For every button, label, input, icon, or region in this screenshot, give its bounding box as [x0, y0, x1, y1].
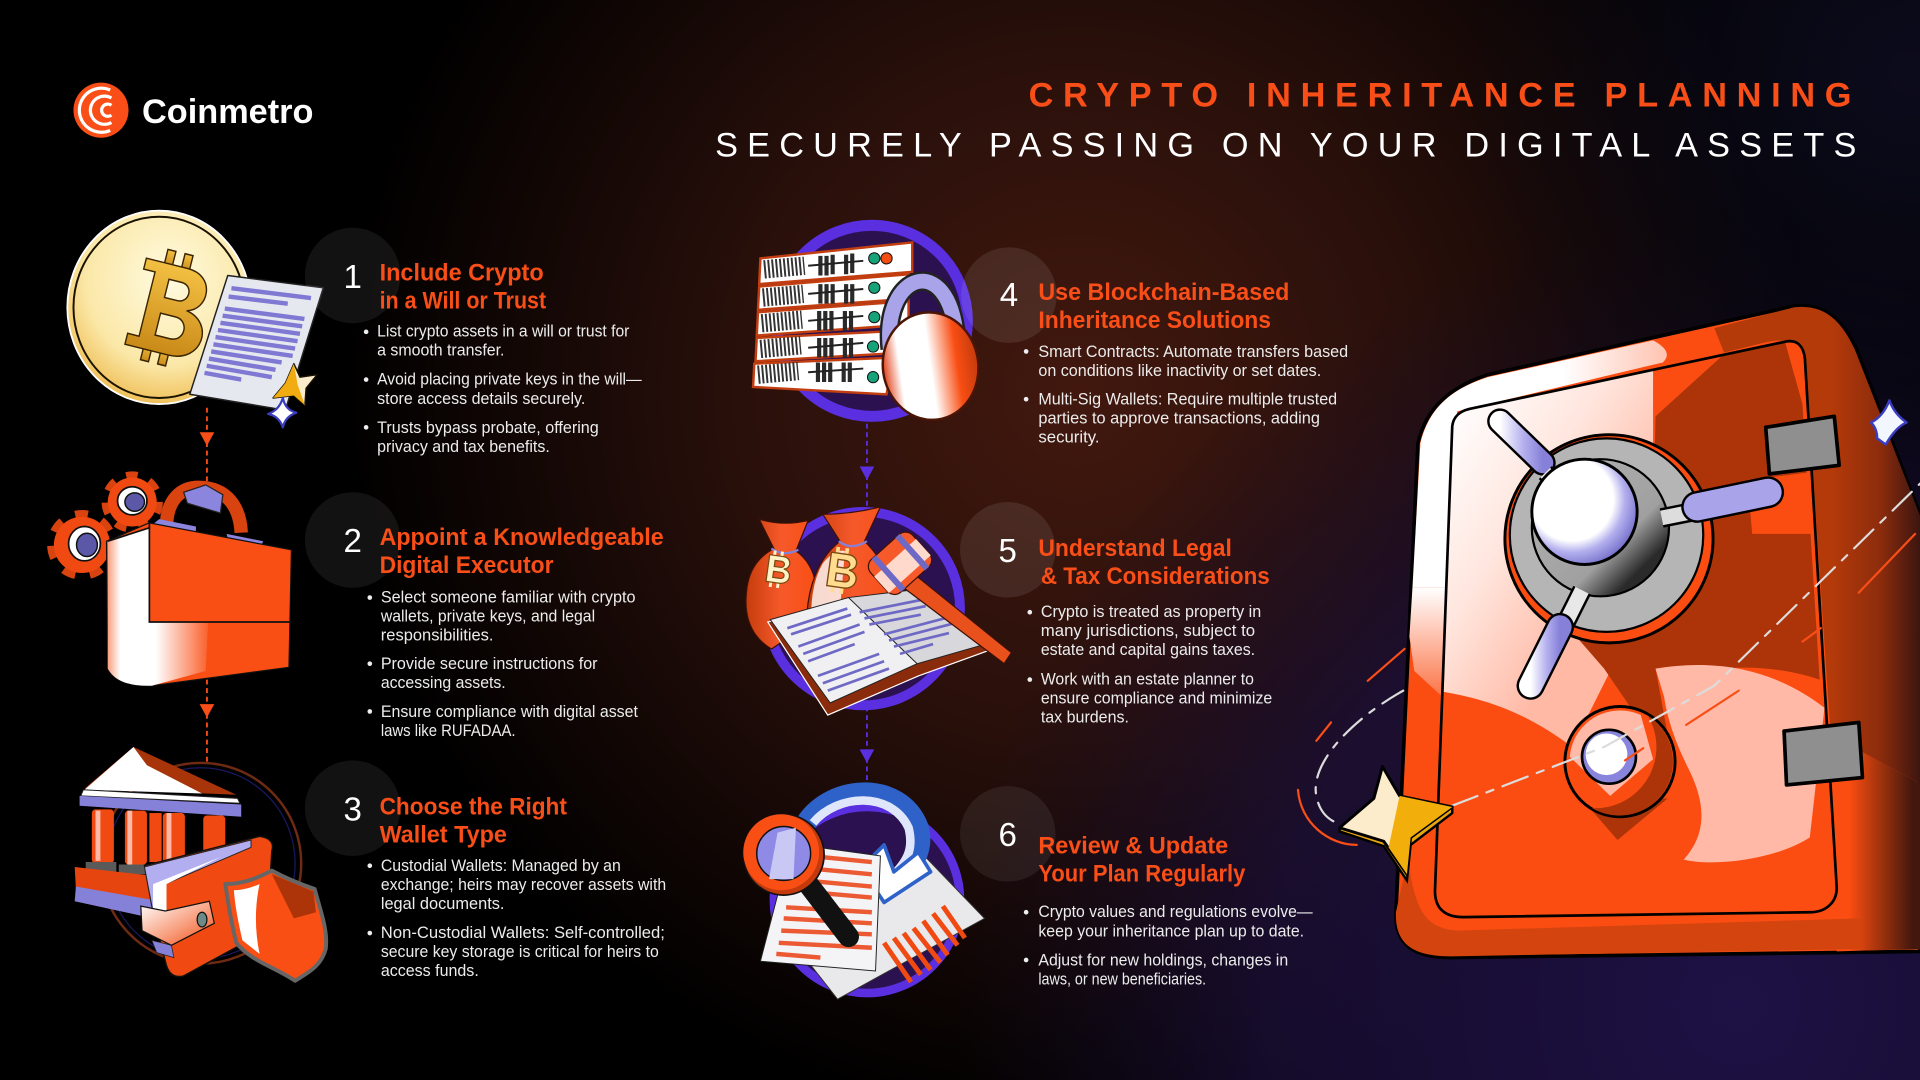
step 3 bullets: Non-Custodial Wallets: Self-controlled;	[381, 924, 665, 942]
step 6 number badge	[960, 786, 1056, 882]
panel: step 1	[305, 228, 642, 456]
step 4 bullets: Multi-Sig Wallets: Require multiple trusted	[1038, 391, 1337, 409]
dial spoke: right	[1662, 492, 1768, 518]
step 1 bullets: Trusts bypass probate, offering	[377, 419, 599, 437]
step 6 bullets	[1024, 903, 1313, 988]
step 5 bullets: ensure compliance and minimize	[1041, 689, 1272, 707]
sparkle	[1871, 400, 1907, 444]
step 3 heading	[380, 793, 567, 848]
step 5 heading	[1038, 535, 1270, 590]
step 1 bullets: List crypto assets in a will or trust for	[377, 323, 630, 341]
step 5 bullets: many jurisdictions, subject to	[1041, 622, 1255, 640]
orbit dashes	[1298, 484, 1920, 845]
panel: step 5	[960, 502, 1272, 726]
step 6 heading: Review & Update	[1038, 832, 1228, 859]
step 4 bullets: security.	[1038, 429, 1100, 447]
step 2 number badge	[305, 492, 400, 588]
step 4 heading: Inheritance Solutions	[1038, 307, 1271, 334]
step 4 heading: Use Blockchain-Based	[1038, 279, 1289, 306]
step 6 bullets: laws, or new beneficiaries.	[1038, 970, 1206, 988]
step 3 bullets: access funds.	[381, 962, 479, 980]
step 5 heading: Understand Legal	[1038, 535, 1232, 562]
step 2 bullets: laws like RUFADAA.	[381, 722, 516, 740]
step 5 heading: & Tax Considerations	[1041, 563, 1270, 590]
logo: Coinmetro	[73, 83, 313, 138]
step 1 bullets: privacy and tax benefits.	[377, 438, 550, 456]
step 4 heading	[1038, 279, 1289, 334]
step 2 heading: Appoint a Knowledgeable	[380, 524, 664, 551]
arrow: step 1 to 2	[200, 408, 214, 487]
step 4 number badge	[961, 247, 1057, 343]
arrow: step 2 to 3	[200, 680, 214, 764]
step 3 number badge	[305, 760, 400, 856]
step 5 bullets	[1027, 603, 1272, 726]
step 1 bullets: a smooth transfer.	[377, 342, 504, 360]
step 6 bullets: keep your inheritance plan up to date.	[1038, 923, 1304, 941]
illustration: large safe	[1298, 306, 1920, 958]
step 2 number badge: 2	[343, 523, 362, 560]
step 2 bullets: Provide secure instructions for	[381, 655, 598, 673]
step 3 heading: Choose the Right	[380, 793, 567, 820]
panel: step 2	[305, 492, 664, 740]
safe hinges	[1766, 416, 1862, 785]
step 2 heading	[380, 524, 664, 579]
step 5 number badge	[960, 502, 1056, 598]
arrow: step 4 to 5	[860, 398, 874, 509]
step 5 number badge: 5	[999, 533, 1017, 570]
step 3 bullets: legal documents.	[381, 895, 504, 913]
step 3 bullets: exchange; heirs may recover assets with	[381, 876, 666, 894]
icon: money bags, law book and gavel	[746, 507, 1011, 715]
arrow: step 5 to 6	[860, 698, 874, 784]
dial knob	[1532, 459, 1637, 564]
step 5 bullets: estate and capital gains taxes.	[1041, 641, 1255, 659]
title: CRYPTO INHERITANCE PLANNING	[1029, 77, 1851, 115]
safe body	[1396, 306, 1920, 958]
step 4 bullets: Smart Contracts: Automate transfers based	[1038, 343, 1348, 361]
step 2 bullets: Select someone familiar with crypto	[381, 588, 636, 606]
icon: bank, wallet and shield	[75, 747, 326, 981]
step 6 heading: Your Plan Regularly	[1038, 861, 1246, 888]
step 4 bullets: parties to approve transactions, adding	[1038, 410, 1320, 428]
safe dial	[1500, 421, 1768, 686]
step 2 bullets: wallets, private keys, and legal	[380, 607, 595, 625]
icon: server with padlock	[753, 225, 985, 426]
step 3 bullets: Custodial Wallets: Managed by an	[381, 857, 621, 875]
step 2 bullets: accessing assets.	[381, 674, 506, 692]
icon: magnifier, documents and refresh arrow	[743, 793, 984, 999]
icon: bitcoin coin and will document	[67, 211, 323, 427]
step 1 bullets: Avoid placing private keys in the will—	[377, 370, 642, 388]
step 1 bullets: store access details securely.	[377, 390, 585, 408]
step 6 number badge: 6	[999, 817, 1017, 854]
panel: step 4	[961, 247, 1348, 447]
step 4 number badge: 4	[1000, 277, 1018, 314]
step 2 bullets: responsibilities.	[381, 626, 493, 644]
safe door	[1435, 341, 1837, 917]
safe lower keyhole knob	[1565, 707, 1675, 840]
step 2 bullets: Ensure compliance with digital asset	[381, 703, 638, 721]
step 5 bullets: Work with an estate planner to	[1041, 670, 1254, 688]
step 1 heading: in a Will or Trust	[380, 288, 546, 315]
step 5 bullets: Crypto is treated as property in	[1041, 603, 1261, 621]
step 3 heading: Wallet Type	[380, 821, 507, 848]
step 4 bullets: on conditions like inactivity or set dates.	[1038, 362, 1321, 380]
step 6 heading	[1038, 832, 1246, 888]
step 3 bullets	[367, 857, 666, 980]
step 2 heading: Digital Executor	[380, 552, 554, 579]
step 2 bullets	[367, 588, 638, 740]
icon: briefcase and gears	[53, 476, 291, 686]
step 3 number badge: 3	[343, 791, 362, 828]
step 6 bullets: Adjust for new holdings, changes in	[1038, 952, 1288, 970]
step 1 bullets	[364, 323, 642, 456]
step 3 bullets: secure key storage is critical for heirs to	[381, 943, 659, 961]
dial spoke: upper	[1500, 421, 1562, 490]
star	[1340, 767, 1452, 880]
step 5 bullets: tax burdens.	[1041, 708, 1129, 726]
step 6 bullets: Crypto values and regulations evolve—	[1038, 903, 1313, 921]
panel: step 6	[960, 786, 1313, 988]
subtitle: SECURELY PASSING ON YOUR DIGITAL ASSETS	[715, 127, 1856, 165]
dial spoke: lower	[1531, 590, 1582, 686]
logo: Coinmetro: Coinmetro	[142, 93, 313, 131]
step 1 number badge: 1	[343, 259, 362, 296]
step 4 bullets	[1024, 343, 1348, 447]
step 1 heading	[380, 259, 546, 315]
step 1 number badge	[305, 228, 400, 323]
panel: step 3	[305, 760, 666, 980]
step 1 heading: Include Crypto	[380, 259, 544, 286]
